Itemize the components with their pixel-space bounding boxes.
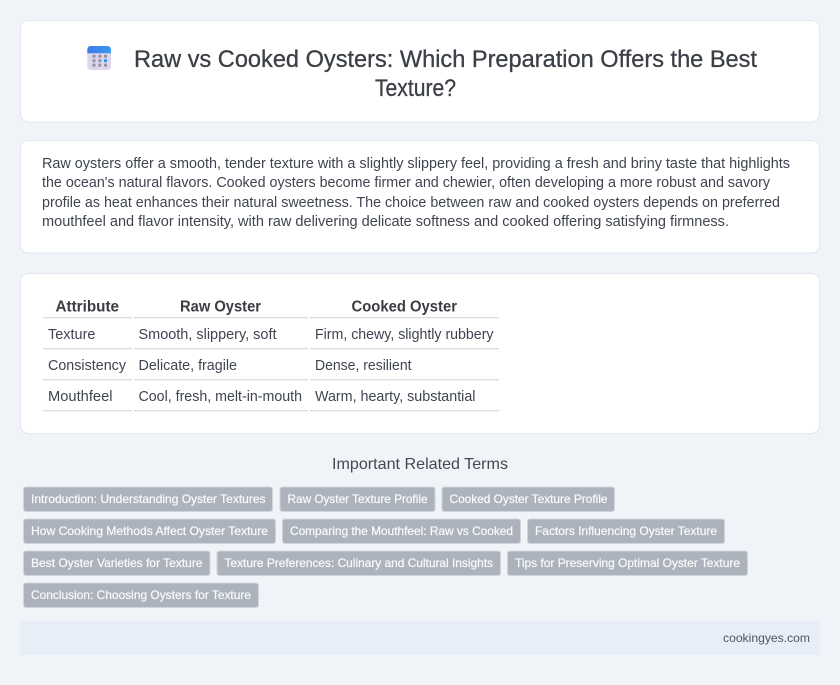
heading: related terms: Important Related Terms <box>332 456 508 473</box>
tag <box>282 519 520 544</box>
row: texture: Texture <box>48 327 96 343</box>
summary text: profile as heat enhances their natural sweetness. The choice between raw and cooked oysters depends on preferred <box>42 195 780 211</box>
tag <box>24 519 276 544</box>
tag: Tips for Preserving Optimal Oyster Texture <box>515 556 740 570</box>
row: consistency: Delicate, fragile <box>138 358 237 374</box>
title: Texture? <box>375 75 456 102</box>
tag: Comparing the Mouthfeel: Raw vs Cooked <box>290 524 513 538</box>
tag: How Cooking Methods Affect Oyster Texture <box>31 524 268 538</box>
panel: header <box>20 20 820 122</box>
summary text: mouthfeel and flavor intensity, with raw delivering delicate softness and cooked offering satisfying firmness. <box>42 214 729 230</box>
title <box>134 46 757 102</box>
tag <box>508 551 748 576</box>
tag <box>528 519 724 544</box>
row: texture: Firm, chewy, slightly rubbery <box>315 327 494 343</box>
tag: Texture Preferences: Culinary and Cultural Insights <box>224 556 493 570</box>
tag <box>280 487 435 512</box>
table header: Attribute <box>56 298 119 316</box>
row: mouthfeel: Warm, hearty, substantial <box>315 389 476 405</box>
tag <box>24 583 258 608</box>
table header: Cooked Oyster <box>352 298 457 316</box>
footer source: cookingyes.com <box>723 631 810 645</box>
panel: comparison table <box>20 274 820 434</box>
footer <box>20 621 820 655</box>
row: consistency <box>48 358 412 374</box>
tag <box>24 487 272 512</box>
tag: Cooked Oyster Texture Profile <box>450 492 608 506</box>
tag: Factors Influencing Oyster Texture <box>535 524 717 538</box>
summary text <box>42 156 790 230</box>
tag: Raw Oyster Texture Profile <box>288 492 428 506</box>
row: consistency: Consistency <box>48 358 127 374</box>
summary text: the ocean's natural flavors. Cooked oysters become firmer and chewier, often developing a more robust and savory <box>42 175 771 191</box>
summary text: Raw oysters offer a smooth, tender texture with a slightly slippery feel, providing a fresh and briny taste that highlights <box>42 156 790 172</box>
tag: Best Oyster Varieties for Texture <box>31 556 203 570</box>
tag <box>24 551 210 576</box>
row: texture: Smooth, slippery, soft <box>138 327 276 343</box>
tag: Conclusion: Choosing Oysters for Texture <box>31 588 251 602</box>
row: mouthfeel <box>48 389 476 405</box>
row: texture <box>48 327 494 343</box>
row: consistency: Dense, resilient <box>315 358 412 374</box>
related term tags <box>24 487 748 608</box>
table header: Raw Oyster <box>180 298 261 316</box>
tag: Introduction: Understanding Oyster Textures <box>31 492 266 506</box>
tag <box>217 551 500 576</box>
tag <box>442 487 614 512</box>
panel: summary paragraph <box>20 140 820 253</box>
icon: calendar <box>87 46 111 70</box>
table rules <box>43 317 499 411</box>
table header <box>56 298 457 316</box>
row: mouthfeel: Mouthfeel <box>48 389 112 405</box>
row: mouthfeel: Cool, fresh, melt-in-mouth <box>138 389 302 405</box>
title: Raw vs Cooked Oysters: Which Preparation Offers the Best <box>134 46 757 73</box>
